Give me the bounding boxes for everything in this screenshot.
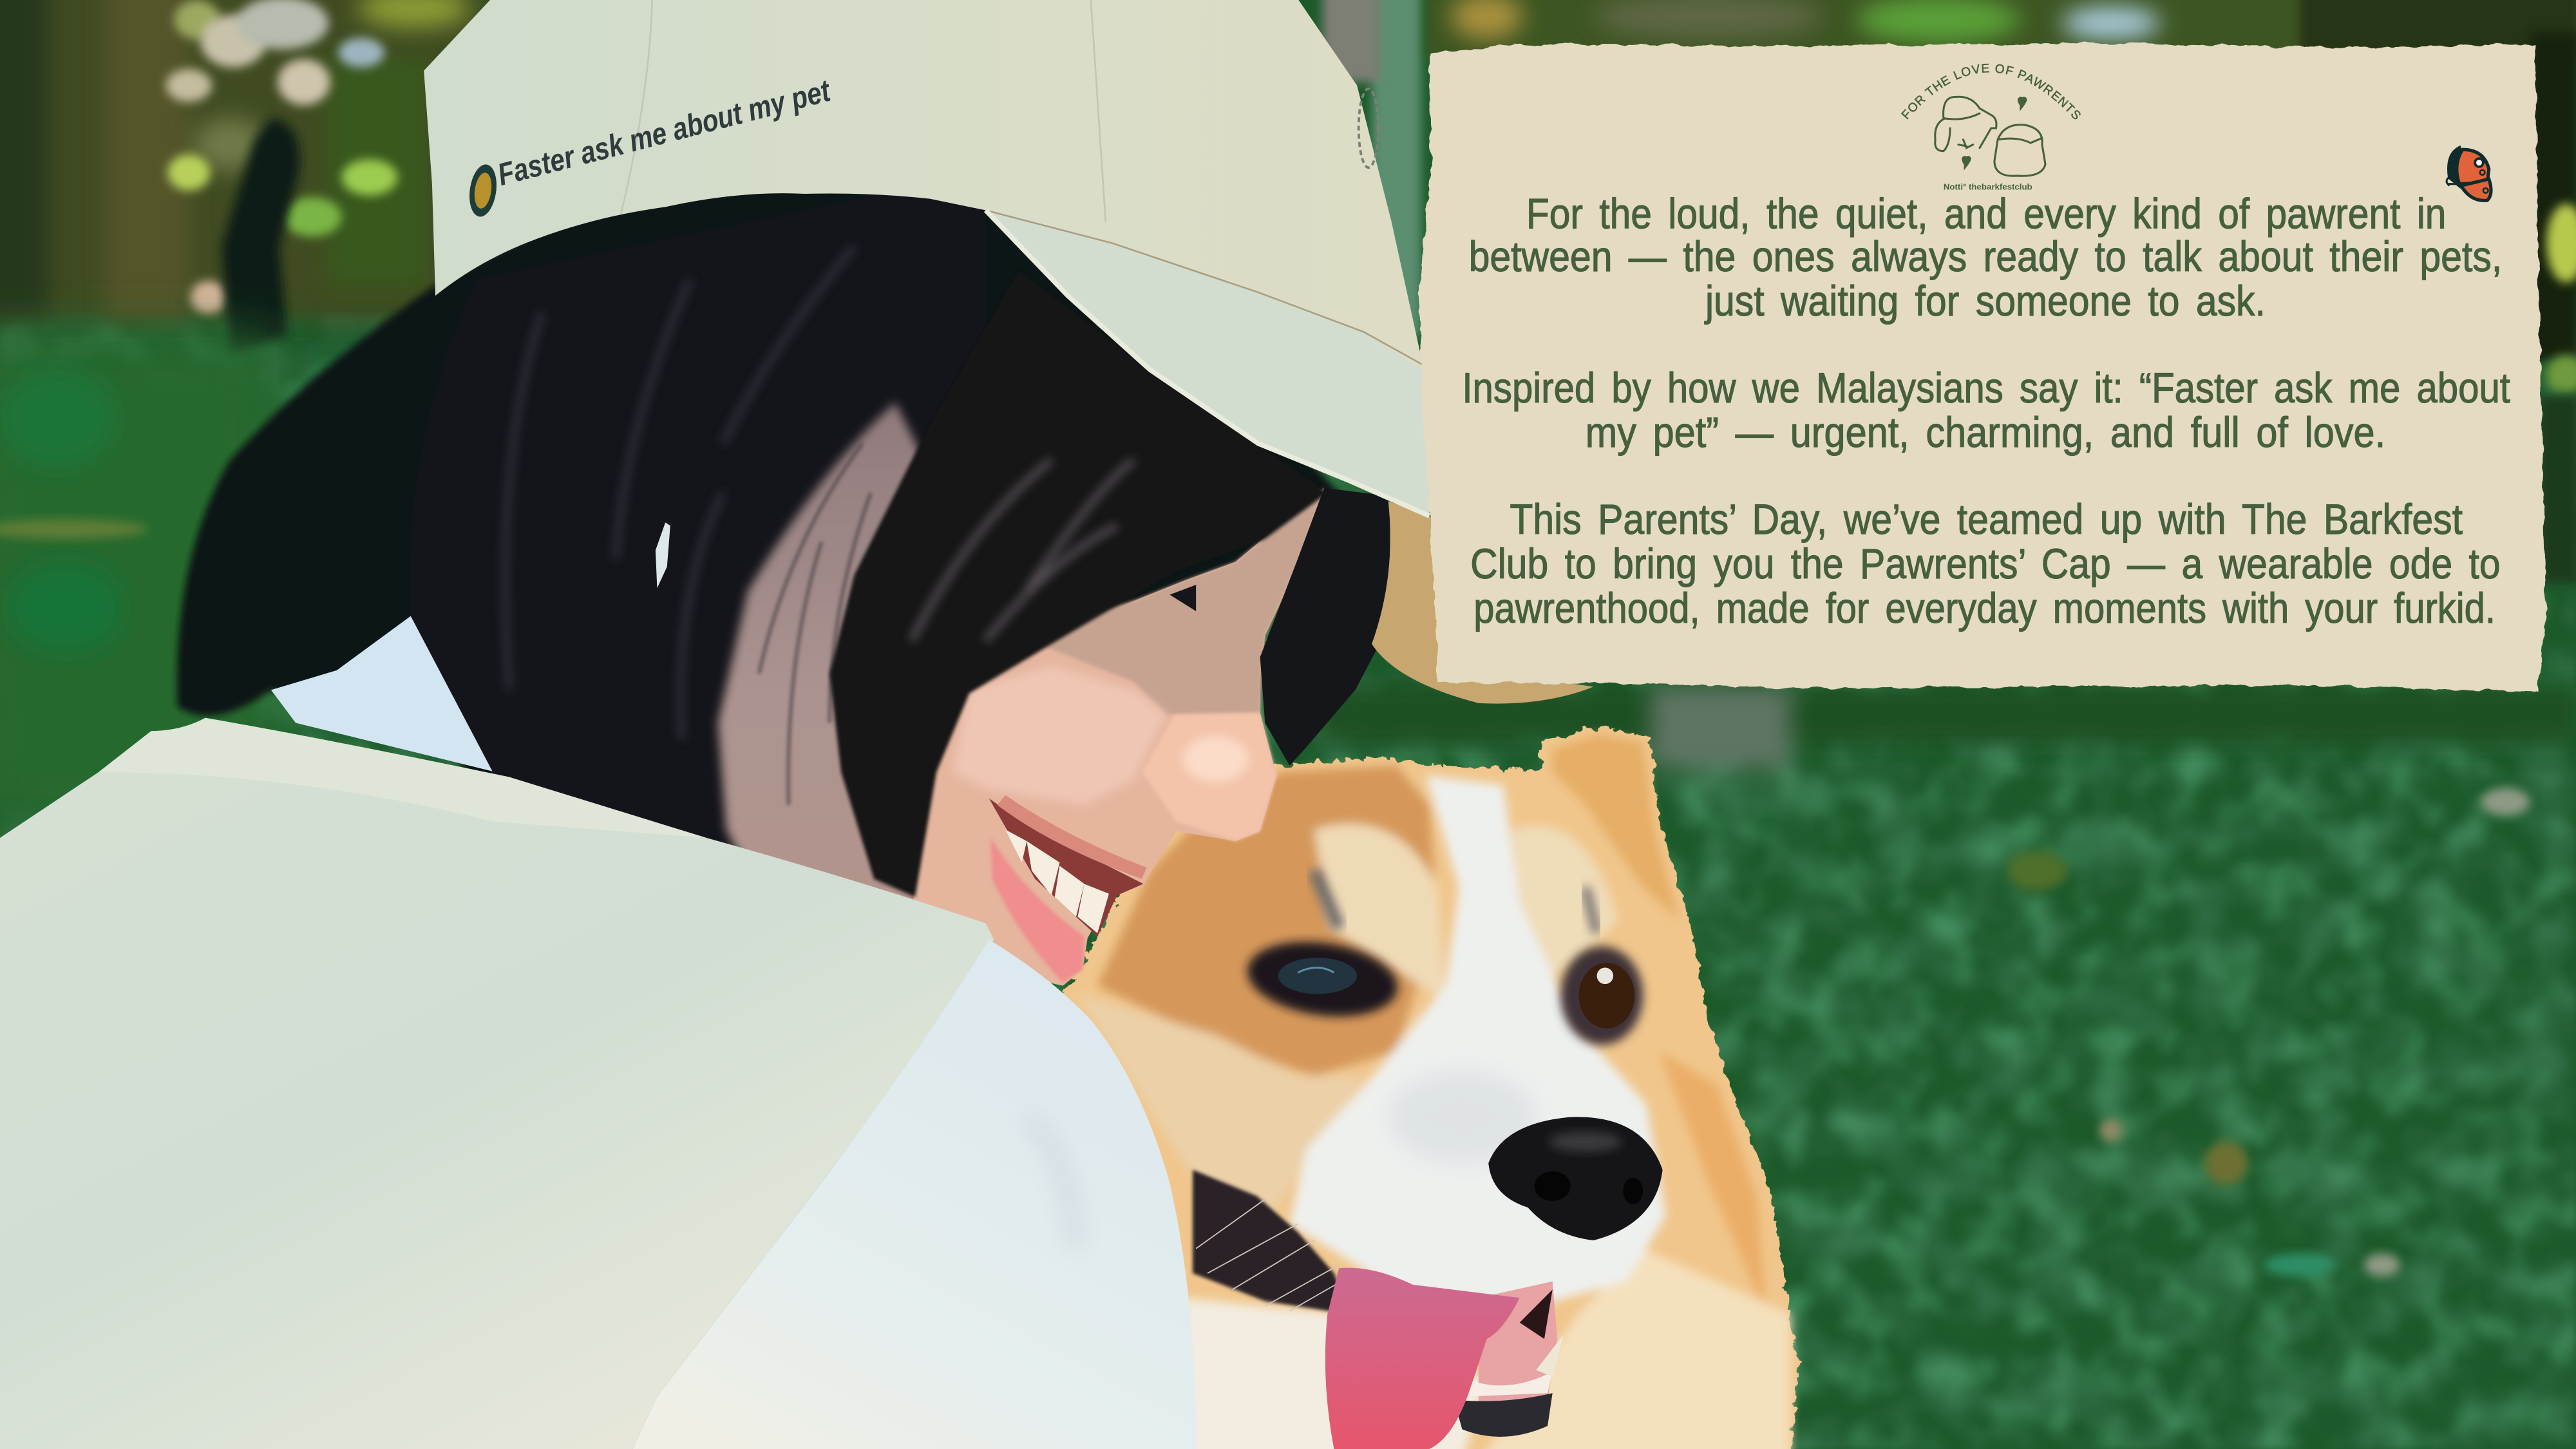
neck and ear skin: [718, 402, 986, 986]
logo arc text: FOR THE LOVE OF PAWRENTS: [1901, 63, 2081, 120]
bang highlights: [912, 460, 1133, 641]
hair back mass: [410, 173, 986, 920]
text block: note body: just waiting for someone to ask.: [1704, 278, 2266, 325]
sleeve fold: [1027, 1117, 1076, 1249]
paper sheet: [1419, 43, 2546, 692]
brim edge: [986, 211, 1429, 516]
dog mouth: [1454, 1282, 1564, 1437]
logo hearts: [1963, 98, 2026, 167]
cap brim underside: [1372, 501, 1593, 704]
dog coat markings: [1076, 734, 1791, 1449]
cap crown: [424, 0, 1429, 394]
forehead shadow: [1019, 488, 1324, 715]
logo: capped jar: [1994, 125, 2045, 176]
dog body silhouette fur: [1059, 726, 1799, 1449]
cap logo patch: [466, 163, 500, 218]
panel: torn paper note: [1418, 41, 2548, 692]
ponytail and hair silhouette: [177, 173, 1339, 986]
sleeve: [632, 940, 1196, 1449]
text block: note body: For the loud, the quiet, and every kind of pawrent in: [1526, 191, 2446, 238]
dog tongue: [1325, 1268, 1520, 1449]
closed eye lashes: [1170, 585, 1196, 611]
cap embroidered text: Faster ask me about my pet: [494, 73, 835, 193]
whiskers: [1196, 1199, 1356, 1311]
earring: [656, 522, 670, 588]
woman: [0, 0, 1593, 1449]
logo credit text: Notti° thebarkfestclub: [1944, 182, 2032, 192]
hair strands over neck: [759, 444, 871, 805]
vest: [0, 718, 994, 1449]
logo: dog and person in cap: [1935, 97, 1996, 151]
logo: for the love of pawrents: [1901, 63, 2081, 192]
dog collar fur: [1193, 1170, 1350, 1314]
text block: note body: [1462, 191, 2510, 632]
dog nose: [1488, 1117, 1663, 1240]
nose: [1142, 713, 1276, 841]
dog right eye: [1560, 887, 1643, 1045]
front hair bangs: [829, 271, 1327, 897]
text block: note body: This Parents’ Day, we’ve teamed up with The Barkfest: [1510, 496, 2463, 544]
cap side logo: [1359, 89, 1378, 167]
right side hair: [1260, 488, 1390, 766]
text block: note body: my pet” — urgent, charming, and full of love.: [1586, 409, 2385, 457]
cap seams: [621, 0, 1106, 222]
cap brim: [986, 211, 1429, 516]
cap seam: [986, 211, 1423, 365]
hair strand highlights: [505, 247, 855, 739]
cheek highlight: [953, 665, 1166, 805]
icon: butterfly: [2447, 148, 2491, 200]
dog left eye: [1243, 871, 1403, 1025]
vest ribbed shoulder: [99, 718, 706, 838]
dog: corgi: [1059, 726, 1799, 1449]
mouth: [989, 795, 1147, 983]
face: [910, 488, 1324, 986]
shirt collar: [271, 616, 509, 775]
muzzle shading: [1388, 1071, 1536, 1163]
